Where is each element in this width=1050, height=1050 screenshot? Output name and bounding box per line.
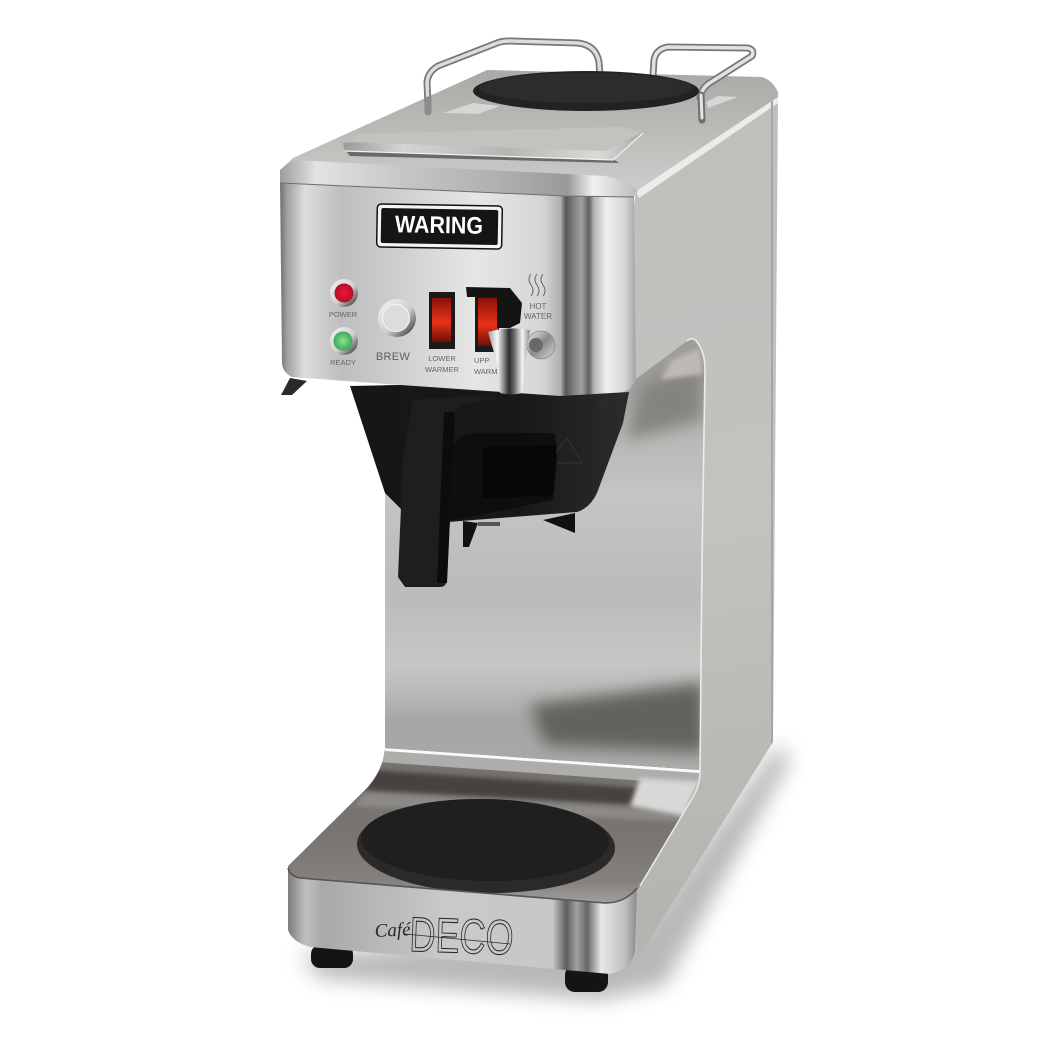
back handles (427, 41, 753, 105)
back panel under the head (385, 339, 705, 775)
lid (343, 127, 643, 163)
logo plate: WARING: WARING (395, 211, 483, 240)
lower warmer pad (356, 797, 616, 895)
coffee maker product illustration (280, 38, 798, 1010)
brew button: BREW (376, 351, 410, 363)
lower warmer switch (425, 292, 460, 374)
logo plate: WARING (377, 204, 502, 249)
power indicator: POWER (329, 310, 358, 319)
ready indicator (330, 327, 358, 367)
hot water label with steam icon: HOT (530, 302, 547, 311)
Cafe DECO logo: Café (374, 919, 413, 942)
feet (311, 945, 608, 992)
upper warmer switch: UPP (474, 356, 489, 365)
handle front legs (428, 95, 702, 120)
brew button (376, 299, 416, 363)
Cafe DECO logo: DECO (409, 908, 514, 966)
upper warmer switch (474, 296, 499, 376)
ready indicator: READY (330, 358, 356, 367)
lower warmer switch: LOWER (428, 354, 456, 363)
hot water tap (466, 287, 555, 394)
stainless side panel (610, 97, 778, 958)
power indicator (329, 279, 358, 319)
black filter basket (350, 385, 629, 547)
top warmer plate (473, 71, 699, 111)
hot water label with steam icon: WATER (524, 312, 552, 321)
hot water label with steam icon (524, 274, 552, 321)
lower warmer base plate (288, 748, 700, 903)
Cafe DECO logo (374, 908, 514, 966)
stainless head front panel (280, 181, 636, 396)
rounded top lip (280, 160, 638, 197)
top surface (280, 70, 778, 190)
basket handle (398, 396, 500, 587)
lower warmer switch: WARMER (425, 365, 460, 374)
upper warmer switch: WARM (474, 367, 497, 376)
drop shadow (300, 745, 790, 1000)
base front face (288, 866, 637, 974)
mounting clips (281, 378, 617, 410)
